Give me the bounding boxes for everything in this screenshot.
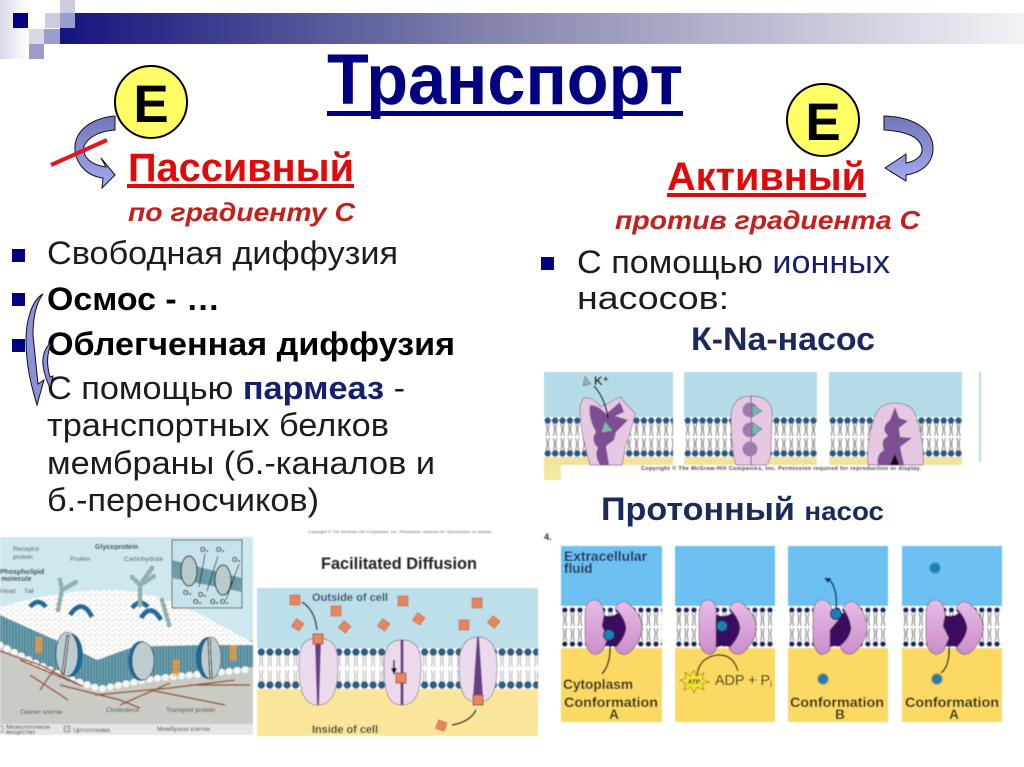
labels: Скелет клетки [20,709,63,716]
heading: active: Активный [667,155,866,199]
proteins [57,633,83,677]
panel: proton state 3 [788,546,888,722]
copyright note: Copyright © The McGraw-Hill Companies, Inc. Permission required for reproduction or display. [308,529,492,534]
passive transport list [12,235,455,518]
diagram title: Facilitated Diffusion [321,554,477,573]
labels: Carbohydrate [124,556,164,563]
diagram: cell membrane [0,537,253,736]
active transport list: С помощью ионных [577,244,890,280]
subheading: passive: по градиенту С [128,197,356,227]
heading: proton pump: Протонный насос [601,491,884,527]
membrane surface [0,590,253,660]
arrow: facilitated diffusion to pores [43,343,53,388]
inset: oxygen channels [172,540,242,608]
passive transport list: б.-переносчиков) [47,482,319,518]
diagram: facilitated diffusion: Inside of cell [312,724,378,736]
cytoskeleton fibres [0,651,250,708]
passive transport list: Свободная диффузия [47,235,398,271]
figure number: 4. [544,532,552,542]
inset: oxygen channels: O₂ [216,547,225,554]
panel: pump state 3 [829,372,962,465]
membrane cross-section [0,615,253,687]
diagram: facilitated diffusion [257,529,538,736]
panel: pump state 4 sliver [979,372,981,462]
labels: Phospholipid [0,569,44,576]
inset: oxygen channels: O₂ [232,557,241,564]
inset: oxygen channels: O₂ [198,592,207,599]
labels: Tail [24,588,34,595]
panel: proton state 2: i [770,679,772,689]
panel: proton state 3: B [835,707,845,722]
arrow: osmosis to pores [26,294,44,405]
labels [0,544,216,716]
panel: proton state 1: fluid [564,561,592,576]
labels: protein [13,554,33,561]
legend strip: Межклеточное [6,724,50,731]
channel protein 2 [384,640,421,705]
labels: Protein [70,556,91,563]
panel: proton state 2: ATP [688,679,701,686]
labels: molecule [1,576,31,583]
active transport list: насосов: [577,280,729,316]
inset: oxygen channels: O₂ [220,599,229,606]
icon: energy circle right: E [805,93,841,152]
surface proteins and glycoproteins [30,602,161,620]
labels: Transport protein [166,707,216,714]
panel: proton state 4: A [949,707,959,722]
side labels: Outside of cell [312,592,388,604]
arrow: energy passive crossed out [51,116,115,188]
heading: passive: Пассивный [128,146,354,190]
cholesterol [39,637,233,676]
panel: proton state 4 [902,546,1002,722]
panel: proton state 4: Conformation [905,695,999,710]
panel: proton state 1: Cytoplasm [563,677,633,692]
labels: Cholesterol [106,707,139,714]
panel: proton state 2 [675,546,775,722]
icon: energy circle left: E [133,75,169,134]
panel: pump state 1 [544,372,673,465]
panel: proton state 3: Conformation [790,695,884,710]
subheading: active: против градиента С [615,205,921,235]
panel: pump state 2 [684,372,817,465]
title: Транспорт [327,41,683,120]
transport arrows [302,602,476,725]
inset: oxygen channels: O₂ [193,599,202,606]
legend strip: Мембрана клетки [157,725,210,733]
inset: oxygen channels: O₂ [210,599,219,606]
legend strip [0,724,253,736]
diagram: proton pump [544,532,1002,722]
legend strip: Цитоплазма [73,727,110,734]
passive transport list: С помощью пармеаз - [47,370,405,406]
icon: energy circle right [787,84,859,156]
legend strip: вещество [6,729,35,736]
channel protein 1 [299,634,338,705]
inset: oxygen channels: O₂ [183,590,192,597]
diagram: K-Na pump [544,372,981,480]
header decoration [0,0,1024,59]
panel: proton state 1: Extracellular [564,549,648,564]
panel: proton state 2: ADP + P [715,672,773,689]
panel: pump state 1: K⁺ [594,374,609,388]
icon: energy circle left [115,66,187,138]
channel protein 3 [459,637,497,705]
passive transport list: мембраны (б.-каналов и [47,445,435,481]
arrow: energy active [884,116,933,181]
panel: proton state 1 [561,546,662,722]
labels: Head [0,588,16,595]
passive transport list: транспортных белков [47,407,389,443]
solute particles [290,595,500,731]
heading: K-Na pump: К-Na-насос [691,321,875,357]
panel: proton state 1: A [609,707,619,722]
labels: Receptor [13,546,40,553]
passive transport list: Осмос - … [47,281,220,317]
panel: proton state 1: Conformation [564,695,658,710]
active transport list [541,244,890,316]
copyright note: Copyright © The McGraw-Hill Companies, Inc. Permission required for reproduction or display. [641,465,921,472]
passive transport list: Облегченная диффузия [47,326,455,362]
labels: Glycoprotein [95,544,138,551]
inset: oxygen channels: O₂ [200,547,209,554]
